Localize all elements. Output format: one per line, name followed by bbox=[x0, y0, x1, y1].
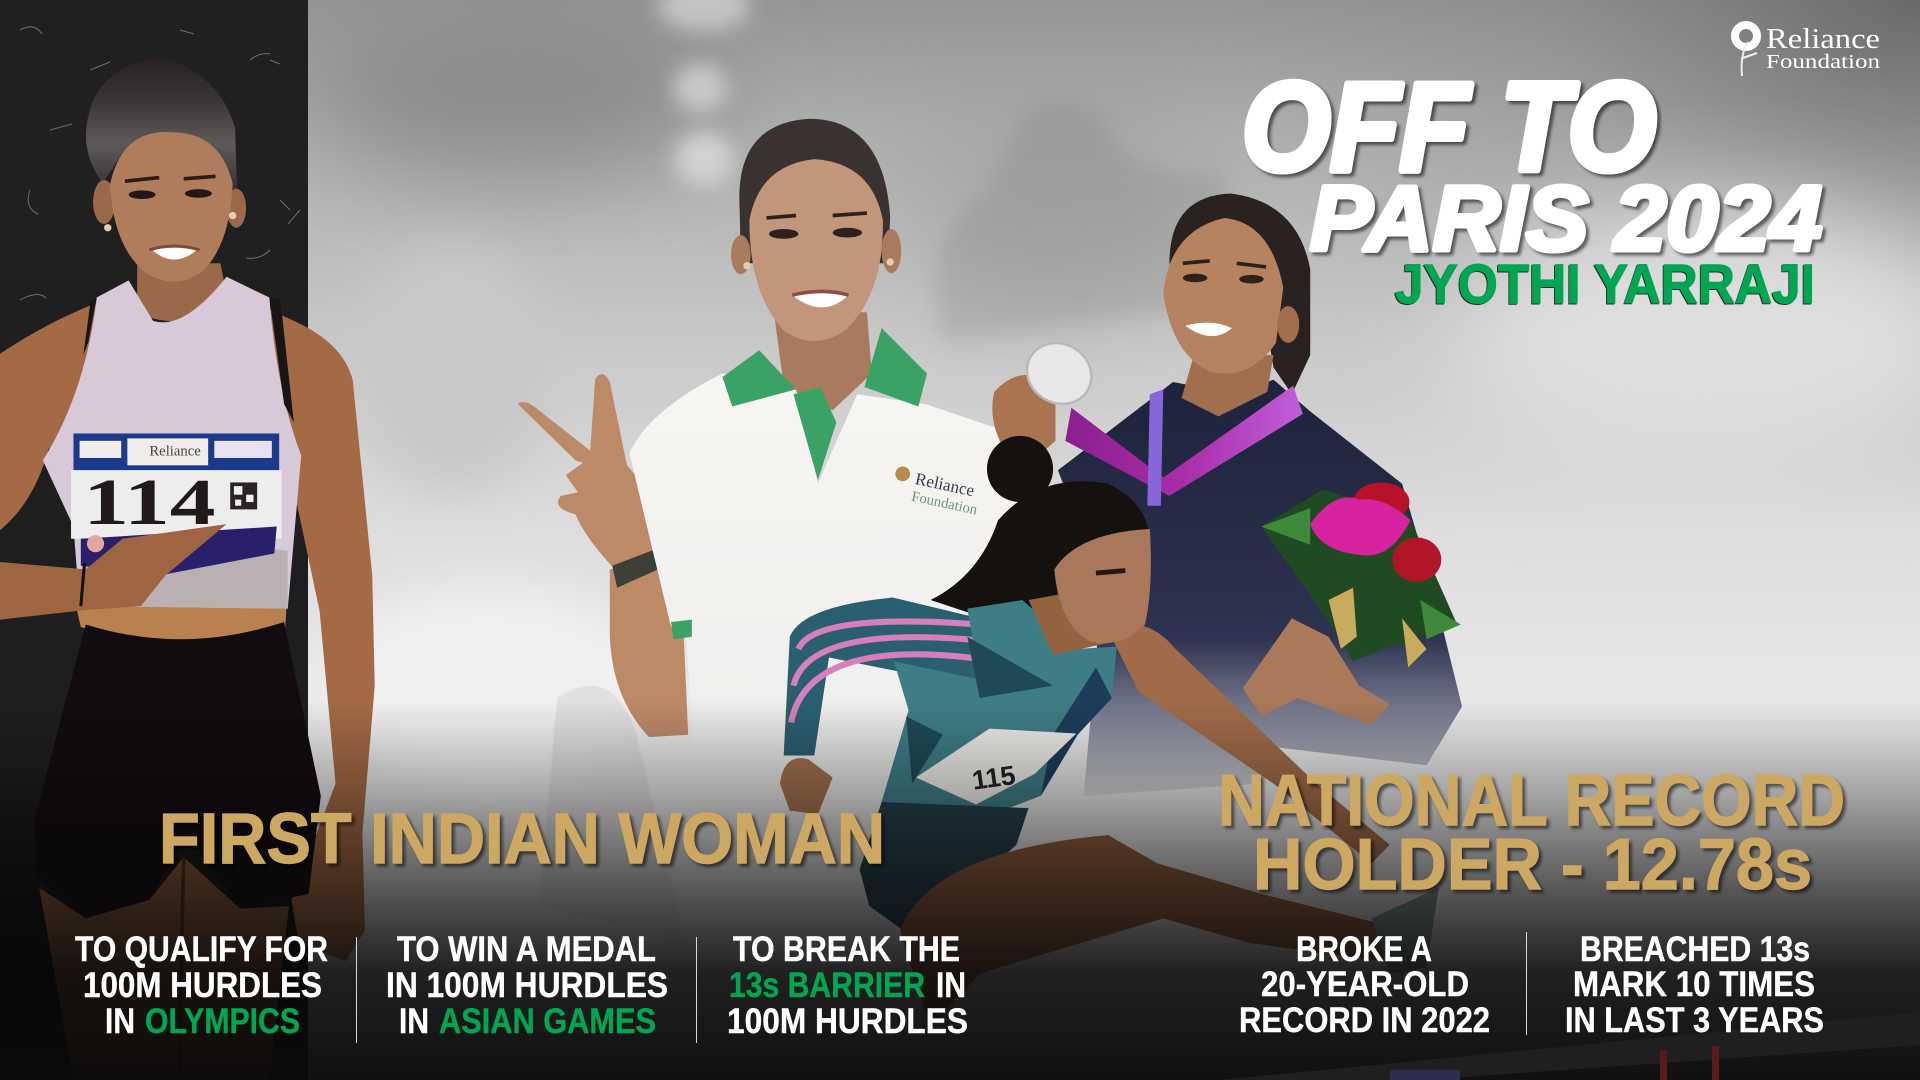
stat: 13s barrier: TO BREAK THE bbox=[733, 930, 960, 969]
medal and hand bbox=[992, 331, 1103, 459]
heading: national record bbox=[1218, 761, 1845, 905]
bouquet hands bbox=[1243, 618, 1390, 725]
neck bbox=[1182, 355, 1273, 416]
racing top bbox=[43, 277, 301, 609]
stat: breached 13s: BREACHED 13s bbox=[1580, 930, 1810, 969]
bib 115: 115 bbox=[970, 760, 1017, 796]
stat: 13s barrier: 13s BARRIER bbox=[729, 966, 925, 1005]
hurdle bar bbox=[1220, 1012, 1920, 1080]
stat: qualify for olympics: TO QUALIFY FOR bbox=[75, 930, 328, 969]
pointing hand and forearm bbox=[0, 524, 227, 620]
stat: medal at asian games: IN 100M HURDLES bbox=[386, 966, 668, 1005]
logo: Reliance Foundation: Reliance bbox=[1766, 24, 1880, 55]
divider bbox=[696, 937, 697, 1043]
heading: national record: NATIONAL RECORD bbox=[1218, 761, 1845, 841]
title: OFF TO bbox=[1242, 58, 1656, 197]
hair and bun bbox=[931, 436, 1149, 624]
logo: Reliance Foundation bbox=[1735, 24, 1880, 76]
midriff bbox=[76, 606, 287, 651]
hair bbox=[1169, 193, 1310, 394]
heading: first indian woman: FIRST INDIAN WOMAN bbox=[159, 800, 885, 879]
stat: medal at asian games bbox=[386, 930, 668, 1041]
stat: 20-year-old record: RECORD IN 2022 bbox=[1239, 1001, 1490, 1040]
race number bib: Reliance bbox=[149, 444, 201, 460]
arms and shoulders bbox=[0, 300, 375, 961]
leading arm bbox=[1108, 624, 1390, 863]
stat: medal at asian games: ASIAN GAMES bbox=[439, 1002, 656, 1041]
collar and placket bbox=[671, 328, 927, 639]
neck bbox=[137, 263, 230, 321]
shoe bbox=[1371, 888, 1439, 973]
shirt logo: Foundation bbox=[910, 489, 979, 519]
dark bottom fade bbox=[0, 700, 1920, 1080]
stat: qualify for olympics: IN bbox=[105, 1002, 135, 1041]
icon: Reliance lotus bbox=[1735, 25, 1757, 76]
bib 115 bbox=[916, 729, 1076, 804]
shorts bbox=[34, 622, 321, 918]
stat: 20-year-old record: BROKE A bbox=[1296, 930, 1432, 969]
icon: watch band bbox=[612, 546, 666, 588]
athlete: left, race bib bbox=[0, 56, 375, 1080]
stat: qualify for olympics bbox=[75, 930, 328, 1041]
bouquet bbox=[1261, 482, 1461, 667]
legs bbox=[39, 857, 289, 1080]
left dark panel bbox=[0, 0, 308, 1080]
stat: 13s barrier: IN bbox=[936, 966, 966, 1005]
stat: medal at asian games: TO WIN A MEDAL bbox=[397, 930, 656, 969]
face bbox=[1163, 218, 1283, 373]
ribbon bbox=[1065, 386, 1303, 496]
icon: raised arm and peace sign bbox=[518, 374, 688, 737]
head bbox=[86, 56, 246, 282]
face bbox=[1054, 529, 1151, 643]
stat: 13s barrier: 100M HURDLES bbox=[727, 1002, 968, 1041]
shirt logo bbox=[890, 465, 984, 519]
polo shirt bbox=[629, 373, 1026, 833]
stat: 20-year-old record: 20-YEAR-OLD bbox=[1261, 965, 1469, 1004]
title bbox=[1242, 58, 1822, 270]
stat: qualify for olympics: 100M HURDLES bbox=[83, 966, 322, 1005]
athlete: right, jacket and bouquet bbox=[992, 193, 1462, 796]
athlete: runner bbox=[780, 436, 1439, 1029]
logo: Reliance Foundation: Foundation bbox=[1766, 51, 1880, 73]
stat: breached 13s bbox=[1565, 930, 1824, 1040]
jacket bbox=[1058, 380, 1462, 796]
divider bbox=[356, 937, 357, 1043]
neck bbox=[774, 312, 872, 410]
race number bib bbox=[71, 433, 282, 576]
athlete: centre, white polo bbox=[518, 119, 1026, 833]
rear arm in striped sleeve bbox=[780, 598, 986, 814]
race number bib: 114 bbox=[83, 466, 216, 539]
title: PARIS 2024 bbox=[1310, 168, 1822, 270]
stat: qualify for olympics: OLYMPICS bbox=[145, 1002, 300, 1041]
divider bbox=[1526, 932, 1527, 1035]
heading: national record: HOLDER - 12.78s bbox=[1253, 825, 1812, 905]
stat: 20-year-old record bbox=[1239, 930, 1490, 1040]
stat: breached 13s: IN LAST 3 YEARS bbox=[1565, 1001, 1824, 1040]
thigh and shin bbox=[900, 835, 1384, 1029]
shorts bbox=[860, 802, 1029, 937]
stat: medal at asian games: IN bbox=[399, 1002, 429, 1041]
stat: 13s barrier bbox=[727, 930, 968, 1041]
stat: breached 13s: MARK 10 TIMES bbox=[1573, 965, 1815, 1004]
head and hair bbox=[731, 119, 901, 341]
shirt logo: Reliance bbox=[914, 469, 976, 500]
athlete name: JYOTHI YARRAJI bbox=[1395, 252, 1815, 315]
teal top bbox=[882, 600, 1117, 833]
neck bbox=[1029, 588, 1108, 655]
